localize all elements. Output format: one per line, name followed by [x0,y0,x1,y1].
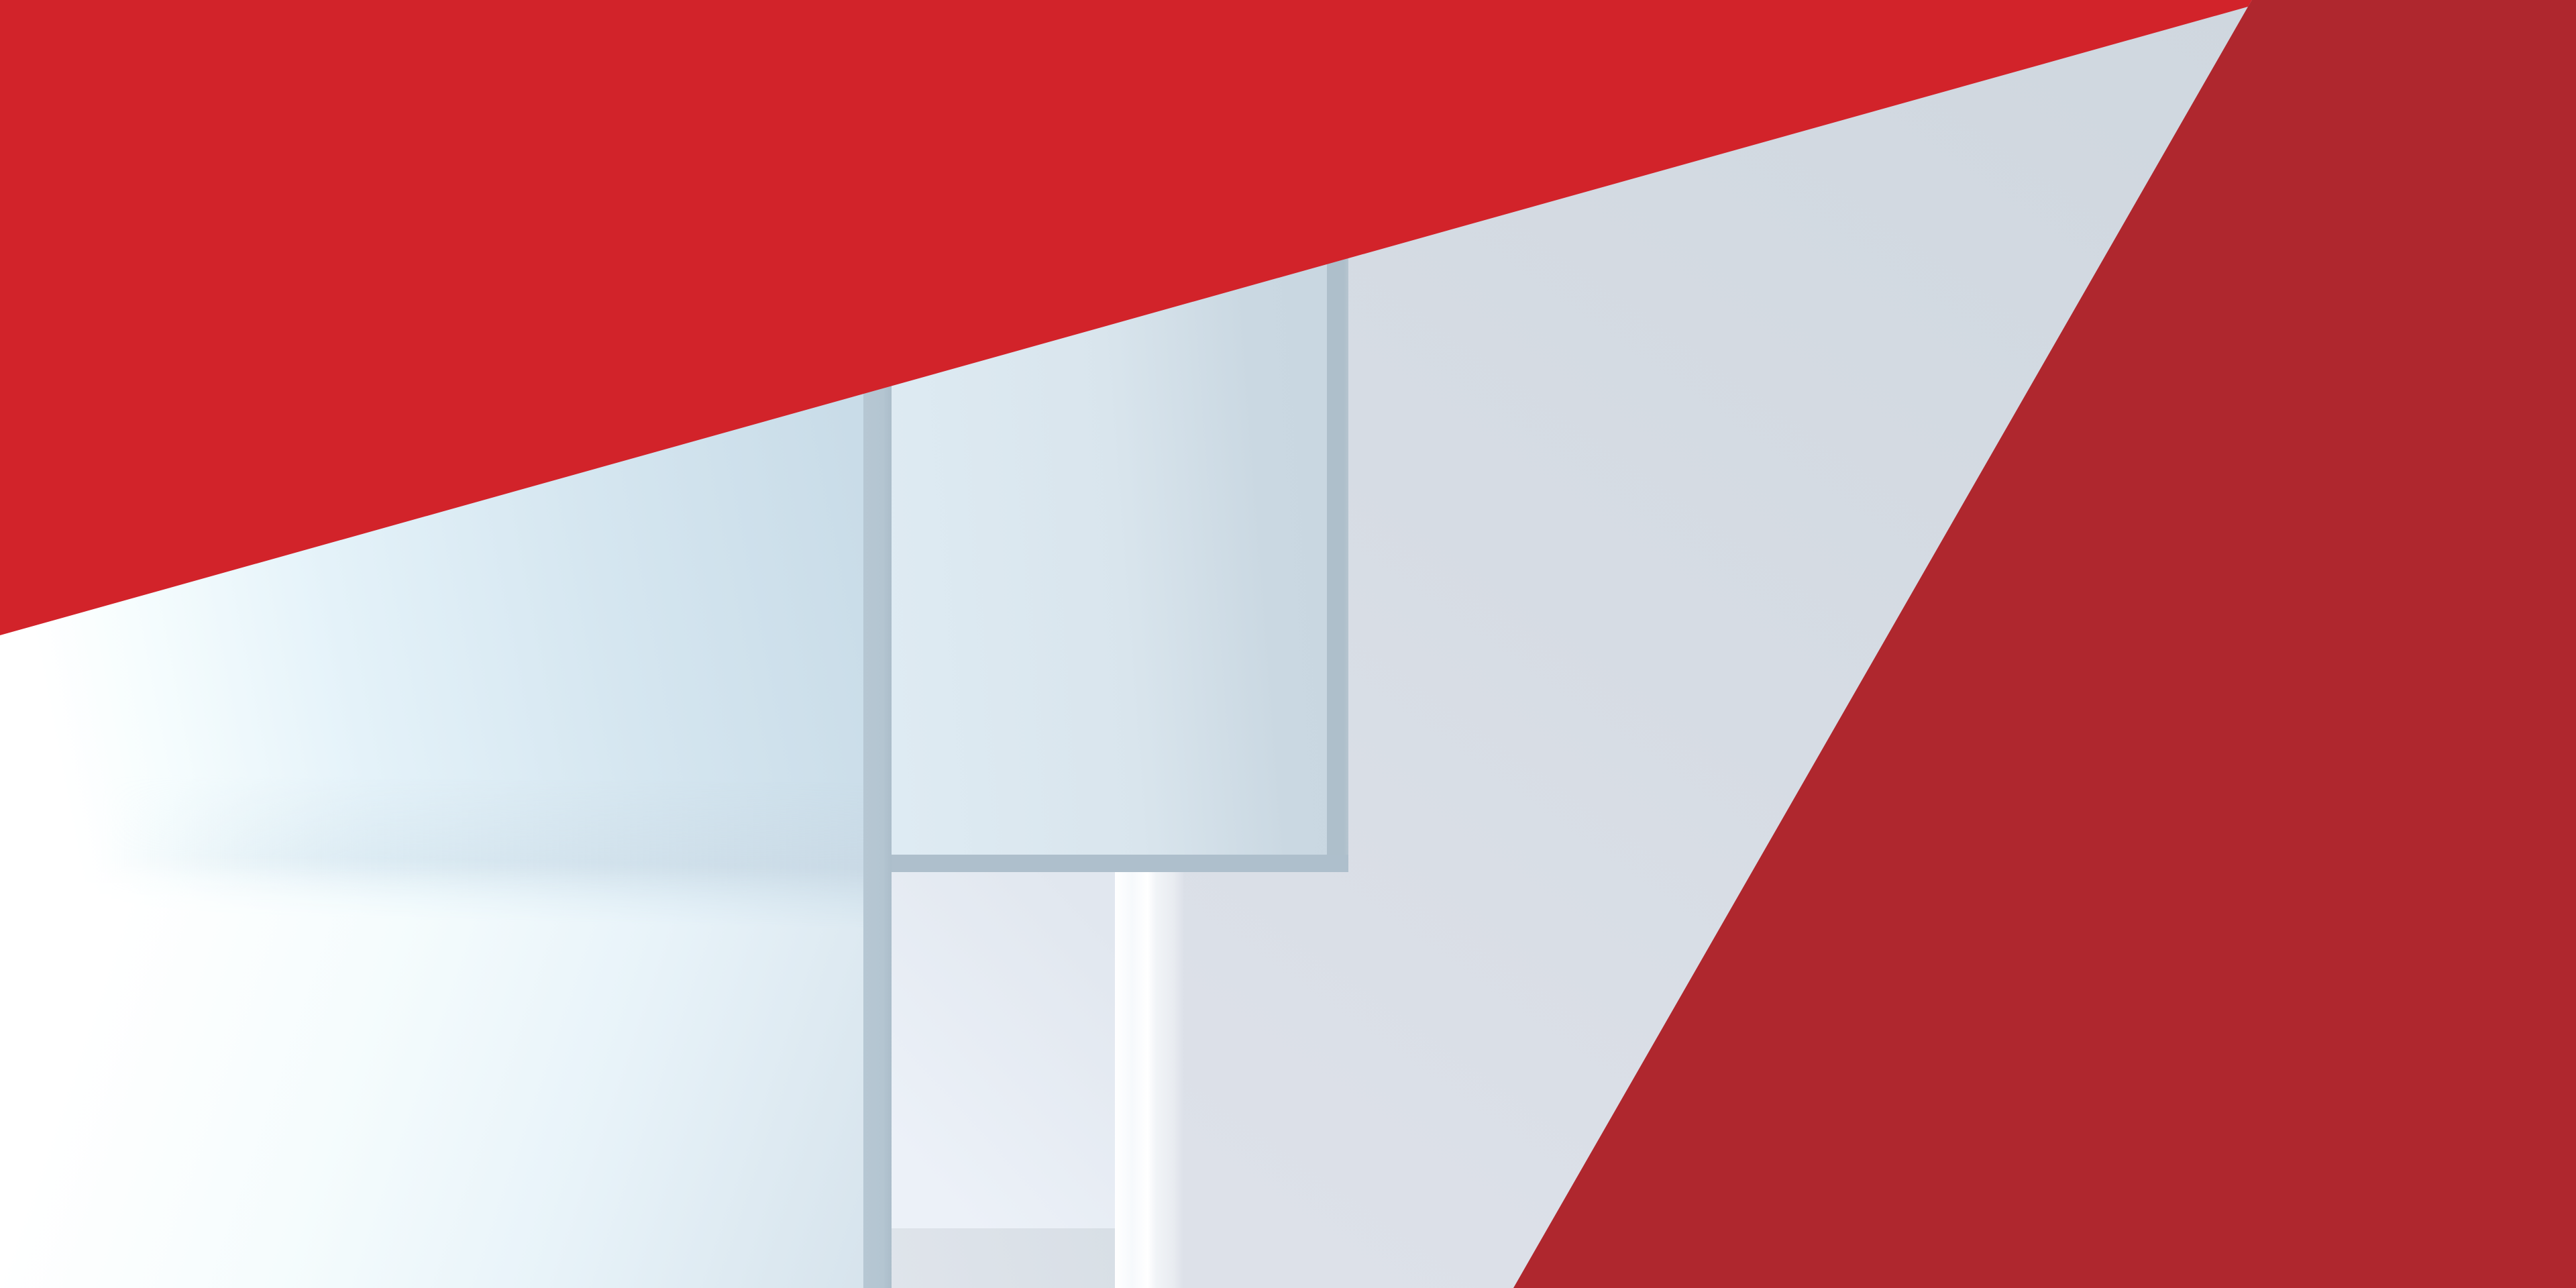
panel: upper window pane [892,0,1327,855]
window frame [863,0,1348,1288]
light stripe [1115,872,1183,1288]
left wall lower section [0,845,872,1288]
panel: lower window pane [892,872,1115,1228]
left wall shadow band [101,771,865,906]
dark red right wedge [1513,0,2576,1288]
left pillar [863,0,892,1288]
right frame post [1327,0,1348,872]
left wall upper section [0,0,872,953]
red top wedge [0,0,2252,635]
panel: right wall [1140,0,2281,1288]
frame crossbar [892,855,1348,872]
panel: left wall [119,394,863,1288]
panel: floor step [892,1228,1115,1288]
